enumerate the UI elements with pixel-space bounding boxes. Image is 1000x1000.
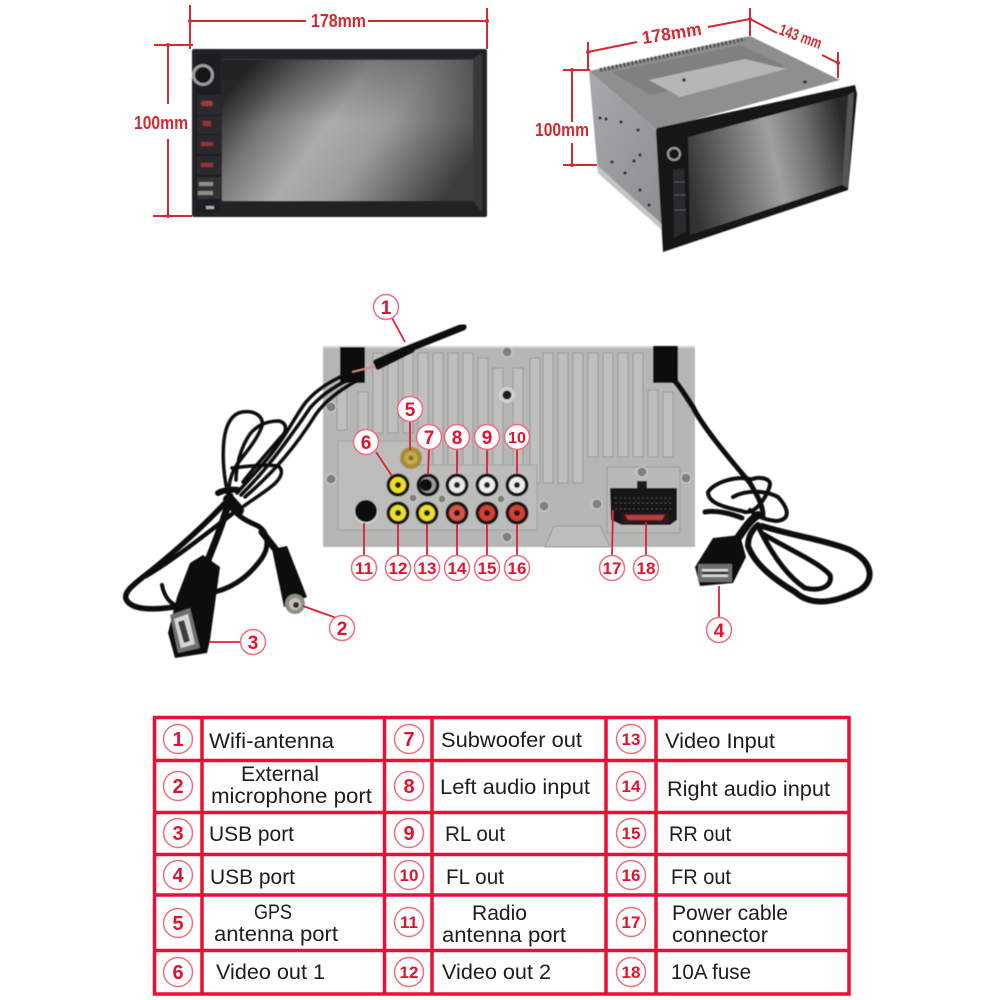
callout 17: 17 [603,559,621,578]
callout 9: 9 [482,428,492,449]
mounting tab: right [653,346,678,383]
row 2 [164,763,830,808]
leader lines for numbered callouts [209,318,719,642]
row 6: 12 [400,963,418,982]
sockets: top row RCA [386,474,528,496]
row 6: 10A fuse [671,961,751,984]
dimension: perspective height 100mm: 100mm [535,120,589,140]
callout 3: 3 [248,633,258,654]
callout 15: 15 [478,559,496,578]
callout 18: 18 [637,559,655,578]
row 4 [164,860,731,890]
callout 7 [416,424,442,450]
row 1: 13 [622,730,640,749]
diagram: rear panel with cables [126,294,870,658]
table grid [154,717,849,994]
row 3: 3 [172,823,184,845]
callout 4 [706,618,732,642]
row 5: GPS [254,901,292,924]
sockets: bottom row RCA [386,502,528,524]
callout 13 [414,556,440,580]
callout 11 [352,556,376,580]
row 5: 11 [400,913,418,932]
callout 9 [474,424,500,450]
row 2: 14 [622,777,641,796]
cable bundle: right USB wire [665,370,870,602]
row 1: Subwoofer out [441,729,582,752]
row 1: Video Input [665,730,775,753]
row 5: Power cable [672,902,788,925]
row 6: Video out 1 [216,961,325,984]
recess: power connector bay [607,467,680,533]
callout 2 [330,616,354,640]
callout 10 [504,424,530,450]
legend table of numbered ports [154,717,849,994]
row 2: 2 [172,776,184,798]
socket: GPS antenna [400,447,422,469]
callout 5: 5 [405,400,416,421]
callout 14 [444,556,470,580]
row 1: 7 [403,729,415,751]
callout 15 [474,556,500,580]
dimension: front width 178mm: 178mm [311,11,366,31]
row 4: 16 [622,866,640,885]
dimension: depth 143 mm: 143 mm [777,22,824,53]
cable: antenna lead with pink wire [352,327,463,372]
dimension: front height 100mm [134,43,193,218]
row 5: 17 [622,913,640,932]
row 6: 18 [622,963,640,982]
dimension: perspective height 100mm [535,68,597,167]
row 5: antenna port [442,924,566,947]
callout 3 [240,630,266,654]
row 3: RR out [669,823,731,846]
callout 6 [354,430,378,454]
callout 1 [374,294,398,320]
connector: 3.5mm microphone jack [262,532,307,614]
row 3: USB port [209,823,294,846]
row 1: 1 [172,729,184,751]
connector: left USB plug [168,555,220,658]
callout 16: 16 [508,559,526,578]
callout 8: 8 [452,428,462,449]
callout 14: 14 [448,559,467,578]
callout 13: 13 [418,559,436,578]
dimension: front height 100mm: 100mm [134,113,188,133]
device: chassis and angled screen [589,36,857,252]
row 6 [164,958,751,986]
callout 2: 2 [337,619,347,640]
callout 8 [444,424,470,450]
cable bundle: left USB and microphone wires [126,371,356,658]
row 6: Video out 2 [442,961,551,984]
row 4: USB port [210,866,295,889]
row 1 [164,724,775,754]
row 5: antenna port [214,923,338,946]
connector: right USB plug [695,535,746,586]
callout 17 [600,556,624,580]
row 6: 6 [172,962,184,984]
perspective view of head unit with dimensions [535,8,857,252]
dimension: depth 143 mm [750,19,840,78]
dimension: perspective width 178mm [586,8,752,70]
rear panel: heat sink body [323,346,695,547]
row 2: External [241,763,319,786]
row 4: FL out [446,866,504,889]
callout 10: 10 [508,430,526,447]
dimension: front width 178mm [188,5,489,49]
row 4: 4 [172,865,184,887]
row 5: connector [672,924,768,947]
recess: RCA socket bay [338,441,537,530]
dimension: perspective width 178mm: 178mm [640,19,703,48]
row 5: 5 [172,913,184,935]
row 4: FR out [671,866,731,889]
callout 16 [504,556,530,580]
row 3: 15 [622,824,640,843]
row 2: 8 [403,776,415,798]
callout 6: 6 [361,433,371,454]
row 1: Wifi-antenna [209,730,334,753]
connector: power harness with fuse [610,481,677,525]
row 3 [164,818,731,848]
device: front panel [192,49,487,217]
row 2: Left audio input [440,776,590,799]
row 3: RL out [445,823,505,846]
front view of head unit with dimensions [134,5,489,218]
row 2: Right audio input [667,778,830,801]
callout 4: 4 [714,621,725,642]
socket: radio antenna [354,500,378,524]
callout 12: 12 [389,559,407,578]
callout 12 [386,556,410,580]
callout 18 [634,556,658,580]
callout 5 [398,396,422,422]
row 2: microphone port [211,785,372,808]
row 4: 10 [400,866,418,885]
callout 1: 1 [381,298,392,319]
row 5: Radio [472,902,527,925]
row 5 [164,901,788,947]
callout 7: 7 [424,428,434,449]
mounting tab: left [340,347,365,383]
callout 11: 11 [355,559,373,578]
row 3: 9 [403,823,415,845]
